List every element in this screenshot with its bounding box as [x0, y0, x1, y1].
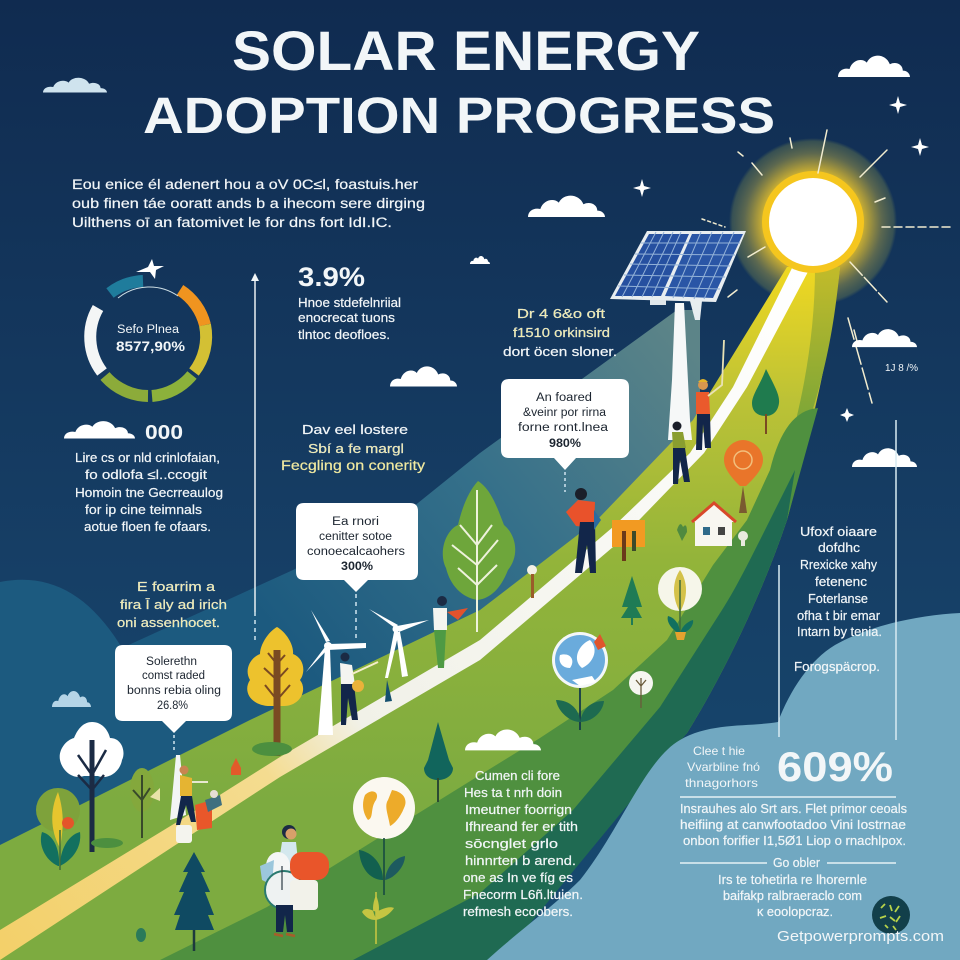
sun rays	[702, 130, 950, 403]
icon: logo circle	[872, 896, 910, 934]
right text column: Forogspäcrop.	[794, 660, 880, 674]
bottom right description	[680, 797, 907, 919]
right text column: Intarn by tenia.	[797, 625, 882, 639]
stat 609%: Vvarbline fnó	[687, 760, 760, 774]
intro text: Eou enice él adenert hou a oV 0C≤l, foastuis.her	[72, 177, 419, 192]
left yellow text: fira Ī aly ad irich	[120, 598, 227, 612]
person with backpack	[260, 825, 329, 936]
intro text: Uilthens oī an fatomivet le for dns fort IdI.IC.	[72, 215, 392, 230]
tree: yellow	[247, 627, 303, 756]
center bottom text: Imeutner foorrign	[465, 803, 572, 817]
callout: lower left: comst raded	[142, 670, 205, 682]
plant: leaf circle	[36, 788, 80, 870]
right text column: ofha t bir emar	[797, 609, 880, 623]
cloud with bubbles: 000	[145, 422, 183, 444]
left text block: for ip cine teimnals	[85, 503, 202, 517]
left text block: Homoin tne Gecrreaulog	[75, 486, 223, 500]
bottom right description: κ eoolopcraz.	[757, 905, 833, 919]
title: ADOPTION PROGRESS	[143, 87, 775, 144]
center bottom text: one as In ve fíg es	[463, 871, 573, 885]
watermark: Getpowerprompts.com	[777, 929, 944, 945]
wind turbine 2	[369, 609, 429, 702]
background slope layer	[0, 310, 700, 870]
marker: orange bulb	[724, 440, 763, 513]
tree: pine	[621, 576, 642, 625]
plant: small globe	[629, 671, 653, 708]
center bottom text: Fnecorm L6ñ.ltuien.	[463, 888, 583, 902]
callout: middle: Ea rnori	[332, 516, 379, 528]
plant: blue globe	[552, 632, 608, 730]
callout: middle: 300%	[341, 561, 373, 573]
yellow text top-right: f1510 orkinsird	[513, 326, 610, 340]
person: orange top	[566, 488, 601, 573]
callout: lower left: 26.8%	[157, 700, 188, 712]
sun glow	[729, 138, 897, 306]
vertical arrow	[251, 273, 259, 640]
right text column: dofdhc	[818, 541, 860, 555]
main green hill	[0, 267, 840, 960]
callout: middle: conoecalcaohers	[307, 546, 405, 558]
stat 3.9%: tlntoc deofloes.	[298, 328, 390, 342]
callout: top right: forne ront.lnea	[518, 422, 609, 434]
callout: middle	[296, 503, 418, 640]
left text block	[75, 451, 223, 534]
callout: top right: 980%	[549, 438, 581, 450]
bottom right description: Insrauhes alo Srt ars. Flet primor ceoals	[680, 802, 907, 816]
donut label	[116, 324, 186, 354]
plant: orange globe	[353, 777, 415, 895]
wind turbine 1	[306, 610, 366, 735]
hill right strip	[796, 267, 840, 420]
person: white shirt	[340, 652, 378, 725]
stat 3.9%: 3.9%	[298, 262, 365, 292]
donut chart	[90, 281, 206, 396]
plant: small yellow	[362, 892, 394, 944]
stat 609%: 609%	[777, 743, 893, 790]
callout: top right	[501, 379, 629, 492]
left text block: fo odlofa ≤l..ccogit	[85, 468, 208, 482]
vertical lines right	[779, 420, 896, 740]
person: dark vest	[672, 422, 690, 484]
center bottom text: Cumen cli fore	[475, 769, 560, 783]
mid text	[281, 423, 425, 473]
right text column: Foterlanse	[808, 592, 868, 606]
callout: top right: &veinr por rirna	[523, 407, 607, 419]
center bottom text: Hes ta t nrh doin	[464, 786, 562, 800]
mid text: Sbí a fe margl	[308, 442, 404, 456]
stat 3.9%	[298, 262, 401, 342]
intro text: oub finen táe ooratt ands b a ihecom sere dirging	[72, 196, 425, 211]
plant: yellow leaf globe	[658, 567, 702, 640]
left text block: Lire cs or nld crinlofaian,	[75, 451, 220, 465]
bottom right description: baifakp ralbraeraclo com	[723, 889, 862, 903]
yellow text top-right: Dr 4 6&o oft	[517, 307, 606, 321]
stars	[136, 96, 929, 422]
bottom right description: Go obler	[773, 856, 820, 870]
icon: house	[677, 503, 748, 546]
callout: lower left	[115, 645, 232, 752]
yellow text top-right	[503, 307, 617, 359]
center bottom text: sōcnglet grlo	[465, 837, 558, 851]
light blue bottom-right area	[487, 613, 960, 960]
icon: orange box	[612, 520, 645, 561]
right text column: Ufoxf oiaare	[800, 525, 877, 539]
left yellow text	[117, 580, 227, 630]
stat 609%	[685, 743, 893, 790]
center bottom text	[463, 769, 583, 919]
tree: small olive	[130, 768, 160, 838]
mid green band	[160, 408, 818, 960]
road to the sun	[0, 266, 810, 960]
bottom right description: Irs te tohetirla re lhorernle	[718, 873, 867, 887]
center bottom text: refmesh ecoobers.	[463, 905, 573, 919]
yellow text top-right: dort öcen sloner.	[503, 345, 617, 359]
marker: small orange	[231, 758, 241, 775]
left yellow text: oni assenhocet.	[117, 616, 220, 630]
tree: tall navy pine	[174, 852, 214, 951]
center bottom text: Ifhreand fer er tith	[465, 820, 578, 834]
person: yellow shirt	[170, 755, 222, 843]
small note: 1J 8 /%	[885, 363, 918, 374]
lamp post	[527, 565, 537, 598]
stat 3.9%: enocrecat tuons	[298, 311, 395, 325]
left text block: aotue floen fe ofaars.	[84, 520, 211, 534]
tree: white	[60, 722, 124, 852]
bottom right description: onbon forifier I1,5Ø1 Liop o rnachlpox.	[683, 834, 906, 848]
intro text	[72, 177, 425, 230]
tree: dark pine	[424, 722, 453, 802]
right text column	[794, 525, 882, 674]
dark green band	[353, 470, 795, 960]
person: green pants	[433, 596, 468, 668]
title: SOLAR ENERGY	[232, 19, 700, 82]
person: helmet orange vest	[696, 340, 724, 450]
callout: middle: cenitter sotoe	[319, 531, 392, 543]
callout: lower left: bonns rebia oling	[127, 685, 221, 697]
right text column: fetenenc	[815, 575, 867, 589]
title	[143, 19, 775, 144]
icon: solar panel	[610, 231, 746, 440]
tree: large green	[443, 481, 515, 632]
mid text: Dav eel lostere	[302, 423, 408, 437]
stat 609%: thnagorhors	[685, 776, 758, 790]
right text column: Rrexicke xahy	[800, 558, 878, 572]
stat 609%: Clee t hie	[693, 744, 745, 758]
callout: lower left: Solerethn	[146, 656, 197, 668]
cloud with bubbles	[64, 421, 183, 444]
small green bush	[136, 928, 146, 942]
bottom right description: heifiing at canwfootadoo Vini Iostrnae	[680, 818, 906, 832]
tree: teardrop	[752, 369, 779, 434]
clouds	[43, 56, 917, 750]
donut label: 8577,90%	[116, 338, 186, 354]
callout: top right: An foared	[536, 392, 592, 404]
center bottom text: hinnrten b arend.	[465, 854, 576, 868]
mid text: Fecgling on conerity	[281, 458, 425, 473]
stat 3.9%: Hnoe stdefelnriial	[298, 296, 401, 310]
icon: sun	[762, 171, 864, 273]
donut label: Sefo Plnea	[117, 324, 180, 336]
left yellow text: E foarrim a	[137, 580, 215, 594]
